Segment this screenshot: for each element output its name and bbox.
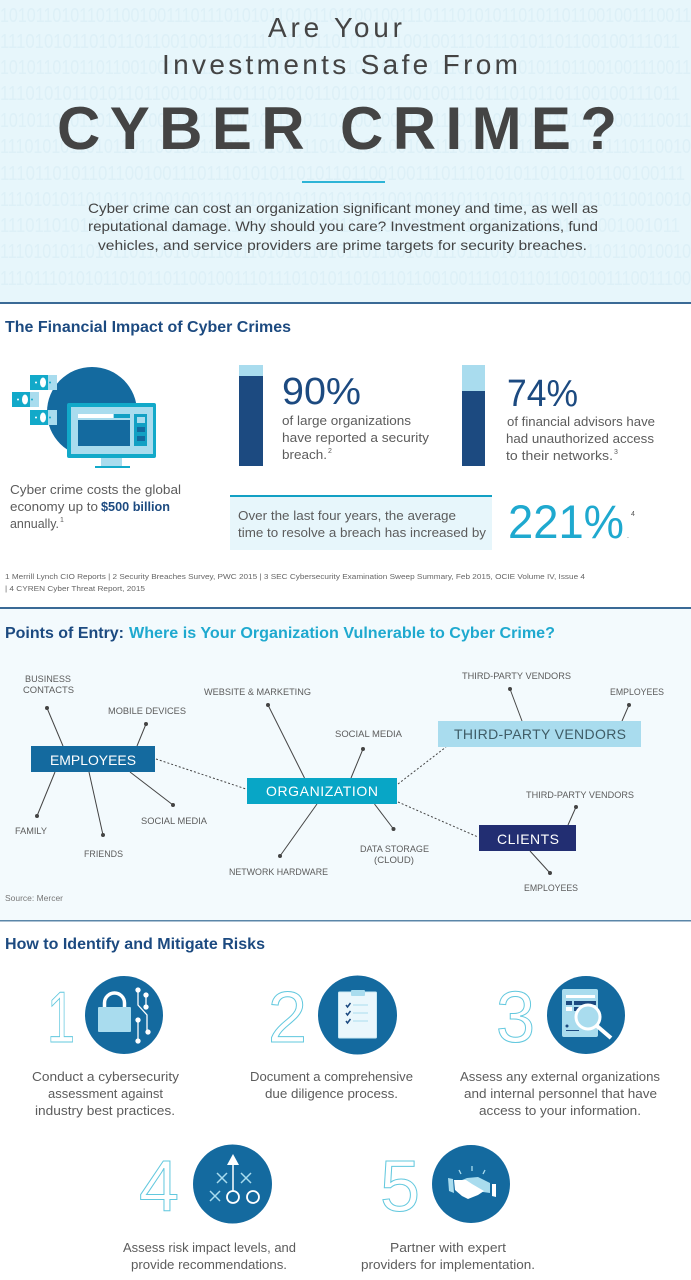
step 2: 2 — [268, 978, 307, 1058]
stat: 221%: . — [627, 533, 629, 540]
diagram labels: (CLOUD) — [374, 855, 414, 866]
node: organization: ORGANIZATION — [266, 783, 378, 799]
footnotes: | 4 CYREN Cyber Threat Report, 2015 — [5, 584, 145, 593]
footnotes: 1 Merrill Lynch CIO Reports | 2 Security Breaches Survey, PWC 2015 | 3 SEC Cybersecurity Examination Sweep Summary, Feb 2015, OCIE Volume IV, Issue 4 — [5, 572, 585, 581]
callout: time to resolve: time to resolve a breach has increased by — [238, 525, 487, 540]
step 5 text — [361, 1240, 535, 1272]
diagram labels: BUSINESS — [25, 674, 71, 685]
stat: 74% — [506, 373, 655, 463]
step 2 text — [250, 1069, 413, 1101]
heading: mitigate risks: How to Identify and Mitigate Risks — [5, 936, 265, 953]
chart: 90% bar — [239, 365, 263, 466]
stat: 90%: 2 — [328, 448, 332, 455]
step 4 text: Assess risk impact levels, and — [123, 1240, 296, 1255]
step 4: 4 — [139, 1147, 179, 1227]
diagram labels: THIRD-PARTY VENDORS — [526, 790, 634, 801]
stat: 90%: of large organizations — [282, 413, 412, 428]
step 3 text: access to your information. — [479, 1103, 641, 1118]
node: clients: CLIENTS — [497, 831, 559, 847]
intro paragraph — [88, 200, 598, 253]
panel: points of entry — [0, 609, 691, 920]
node: clients — [479, 825, 576, 851]
step 3 text: Assess any external organizations — [460, 1069, 660, 1084]
heading: financial impact: The Financial Impact of Cyber Crimes — [5, 319, 291, 336]
stat: 74%: to their networks. — [506, 448, 613, 463]
stat: 74%: had unauthorized access — [506, 431, 655, 446]
text: global cost: $500 billion — [101, 499, 170, 514]
step 5 text: Partner with expert — [390, 1240, 506, 1255]
step 3 text: and internal personnel that have — [464, 1086, 657, 1101]
panel: financial impact — [0, 304, 691, 607]
callout: time to resolve: Over the last four years, the average — [238, 508, 456, 523]
stat: 221%: 4 — [631, 511, 635, 518]
step 1 text — [32, 1069, 180, 1118]
text: global cost: 1 — [60, 517, 64, 524]
node: third-party vendors — [438, 721, 641, 747]
diagram labels: CONTACTS — [23, 685, 74, 696]
text: global cost — [10, 482, 181, 531]
title: CYBER CRIME? — [57, 95, 617, 162]
step 3 text — [460, 1069, 660, 1118]
diagram labels: WEBSITE & MARKETING — [204, 687, 311, 698]
panel: hero header — [0, 0, 691, 302]
diagram labels — [15, 671, 664, 894]
stat: 90%: 90% — [282, 371, 361, 413]
icon: monitor with money — [12, 367, 156, 468]
diagram labels: DATA STORAGE — [360, 844, 429, 855]
node: third-party vendors: THIRD-PARTY VENDORS — [454, 726, 626, 742]
intro paragraph: vehicles, and service providers are prime targets for security breaches. — [98, 237, 587, 253]
step 2 text: due diligence process. — [265, 1086, 398, 1101]
icon: clipboard — [318, 976, 397, 1054]
title: Investments Safe From — [162, 49, 518, 80]
diagram labels: MOBILE DEVICES — [108, 706, 186, 717]
diagram labels: EMPLOYEES — [610, 687, 664, 698]
step 1: 1 — [47, 978, 75, 1058]
diagram labels: SOCIAL MEDIA — [335, 729, 403, 740]
stat: 74%: 74% — [507, 373, 578, 415]
step 2 — [250, 976, 413, 1101]
text: global cost: economy up to — [10, 499, 98, 514]
intro paragraph: Cyber crime can cost an organization significant money and time, as well as — [88, 200, 598, 216]
stat: 90% — [282, 371, 430, 462]
step 1 — [32, 976, 180, 1118]
step 5: 5 — [380, 1147, 420, 1227]
title: Are Your — [268, 12, 402, 43]
diagram labels: THIRD-PARTY VENDORS — [462, 671, 571, 682]
title — [57, 12, 617, 162]
icon: play diagram — [193, 1144, 272, 1224]
diagram labels: FRIENDS — [84, 849, 123, 860]
diagram labels: NETWORK HARDWARE — [229, 867, 328, 878]
stat: 90%: breach. — [282, 447, 327, 462]
node: employees: EMPLOYEES — [50, 752, 136, 768]
node: employees — [31, 746, 155, 772]
heading: points of entry: Points of Entry: — [5, 625, 124, 642]
source note: Source: Mercer — [5, 894, 63, 903]
footnotes — [5, 572, 585, 593]
step 3 — [460, 976, 660, 1118]
heading: points of entry: Where is Your Organization Vulnerable to Cyber Crime? — [129, 625, 555, 642]
node: organization — [247, 778, 397, 804]
diagram labels: SOCIAL MEDIA — [141, 816, 208, 827]
stat: 74%: of financial advisors have — [507, 414, 655, 429]
step 4 — [123, 1144, 296, 1272]
intro paragraph: reputational damage. Why should you care? Investment organizations, fund — [88, 218, 598, 234]
step 4 text: provide recommendations. — [131, 1257, 287, 1272]
icon: handshake — [432, 1145, 510, 1223]
step 1 text: industry best practices. — [35, 1103, 175, 1118]
step 5 text: providers for implementation. — [361, 1257, 535, 1272]
text: global cost: Cyber crime costs the global — [10, 482, 181, 497]
step 1 text: Conduct a cybersecurity — [32, 1069, 180, 1084]
step 3: 3 — [496, 978, 535, 1058]
chart: 74% bar — [462, 365, 485, 466]
step 5 — [361, 1145, 535, 1272]
icon: padlock and circuit — [85, 976, 163, 1054]
diagram labels: FAMILY — [15, 826, 48, 837]
stat: 221%: 221% — [508, 495, 624, 548]
callout: time to resolve — [230, 495, 492, 550]
stat: 90%: have reported a security — [282, 430, 430, 445]
connectors — [36, 688, 630, 874]
stat: 74%: 3 — [614, 449, 618, 456]
text: global cost: annually. — [10, 516, 59, 531]
step 2 text: Document a comprehensive — [250, 1069, 413, 1084]
icon: magnifier over document — [547, 976, 625, 1054]
step 1 text: assessment against — [48, 1086, 163, 1101]
diagram labels: EMPLOYEES — [524, 883, 578, 894]
panel: mitigate risks — [0, 922, 691, 1280]
step 4 text — [123, 1240, 296, 1272]
